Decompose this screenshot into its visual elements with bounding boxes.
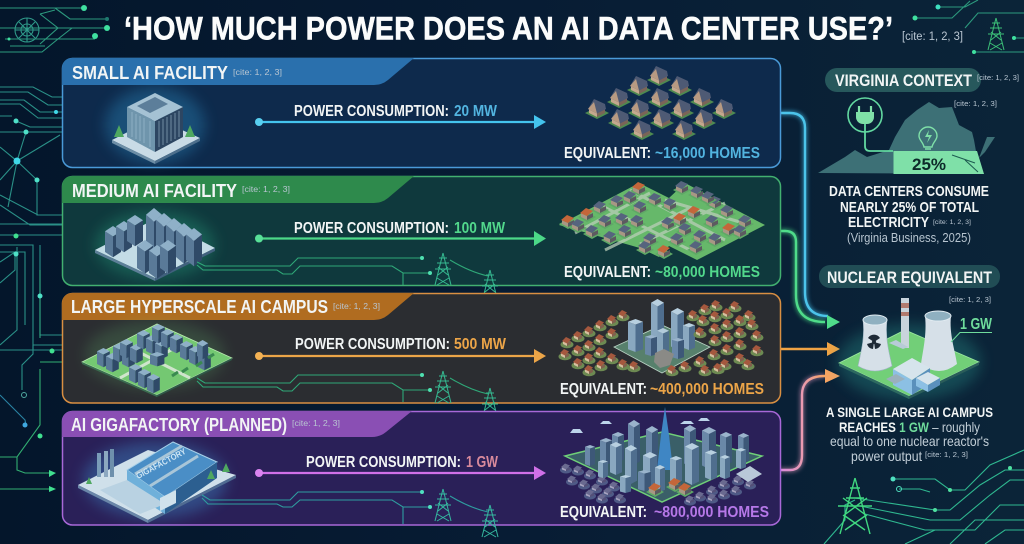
pill heading background	[825, 68, 981, 92]
circuit traces: top-right with pylon	[912, 0, 1024, 54]
citation: [cite: 1, 2, 3]	[977, 73, 1019, 82]
panel header: large	[62, 293, 414, 320]
icon: small data center building	[105, 87, 205, 164]
arrow	[255, 349, 546, 363]
panel header: small	[62, 58, 414, 85]
equivalent label: EQUIVALENT:	[560, 504, 647, 521]
panel: large hyperscale AI campus	[62, 293, 780, 420]
homes neighborhood	[559, 181, 765, 260]
source: (Virginia Business, 2025)	[847, 231, 971, 245]
panel header: gigafactory	[62, 411, 412, 437]
label: 1 GW	[951, 316, 993, 342]
map: Virginia with 25% share	[818, 102, 995, 174]
heading: medium AI facility: MEDIUM AI FACILITY	[72, 180, 238, 201]
description text: equal to one nuclear reactor's	[830, 433, 989, 449]
section: Virginia context	[818, 68, 1019, 245]
power value: 1 GW	[466, 454, 499, 471]
icon: hyperscale campus	[82, 321, 232, 397]
power value: 20 MW	[454, 103, 498, 120]
equivalent label: EQUIVALENT:	[564, 264, 651, 281]
circuit traces: left side	[0, 87, 62, 489]
panel: AI gigafactory	[62, 407, 780, 537]
heading: small AI facility: SMALL AI FACILITY	[72, 62, 229, 83]
equivalent value: ~80,000 HOMES	[655, 264, 760, 281]
icon: neural network hexagon	[15, 18, 39, 42]
homes cluster	[585, 66, 736, 140]
top-left nodes	[8, 5, 110, 40]
equivalent label: EQUIVALENT:	[564, 145, 651, 162]
heading: nuclear equivalent: NUCLEAR EQUIVALENT	[827, 268, 993, 287]
citation: [cite: 1, 2, 3]	[925, 450, 968, 459]
equivalent value: ~400,000 HOMES	[650, 381, 764, 398]
circuit traces and pylons	[197, 253, 498, 302]
heading: AI gigafactory: AI GIGAFACTORY (PLANNED)	[71, 414, 287, 435]
citation: [cite: 1, 2, 3]	[233, 67, 282, 77]
connector arrows to nuclear	[780, 113, 840, 470]
arrow	[255, 231, 546, 246]
equivalent label: EQUIVALENT:	[560, 381, 647, 398]
description text	[826, 404, 993, 464]
description text	[829, 183, 989, 231]
campus city with homes	[558, 299, 764, 376]
title: ‘HOW MUCH POWER DOES AN AI DATA CENTER USE?’	[124, 10, 893, 46]
power label: POWER CONSUMPTION:	[294, 220, 449, 237]
panel: small AI facility	[62, 58, 780, 168]
arrow	[255, 115, 546, 129]
pill heading background	[819, 265, 1000, 288]
description text: DATA CENTERS CONSUME	[829, 183, 989, 200]
section: nuclear equivalent	[819, 265, 1000, 464]
icon: gigafactory building	[78, 442, 236, 523]
equivalent value: ~800,000 HOMES	[654, 504, 769, 521]
description text: ELECTRICITY	[848, 214, 929, 231]
description text: NEARLY 25% OF TOTAL	[840, 199, 979, 216]
power label: POWER CONSUMPTION:	[306, 454, 461, 471]
citation: [cite: 1, 2, 3]	[954, 99, 997, 108]
citation: [cite: 1, 2, 3]	[242, 184, 290, 194]
description text: power output	[851, 448, 922, 464]
panel: medium AI facility	[62, 176, 780, 302]
label: 1 GW: 1 GW	[960, 316, 993, 333]
arrow	[255, 466, 546, 480]
citation: [cite: 1, 2, 3]	[333, 301, 380, 311]
power value: 100 MW	[454, 220, 506, 237]
description text: A SINGLE LARGE AI CAMPUS	[826, 404, 993, 420]
title citation: [cite: 1, 2, 3]	[902, 31, 963, 43]
power label: POWER CONSUMPTION:	[295, 336, 450, 353]
power value: 500 MW	[454, 336, 507, 353]
map: Virginia with 25% share: 25%	[912, 155, 946, 174]
citation: [cite: 1, 2, 3]	[292, 418, 340, 428]
heading: large hyperscale AI campus: LARGE HYPERSCALE AI CAMPUS	[71, 296, 328, 317]
icon: medium server cluster	[95, 208, 215, 281]
power label: POWER CONSUMPTION:	[294, 103, 449, 120]
panel header: medium	[62, 176, 414, 203]
circuit traces and pylons	[202, 489, 498, 537]
circuit traces and pylons	[197, 371, 498, 420]
citation: [cite: 1, 2, 3]	[933, 219, 971, 226]
icon: gigafactory building: GIGAFACTORY	[134, 446, 188, 481]
icon: nuclear plant	[837, 298, 981, 400]
description text: REACHES 1 GW – roughly	[839, 419, 980, 435]
circuit traces: top-left	[0, 8, 107, 52]
heading: Virginia context: VIRGINIA CONTEXT	[835, 71, 973, 90]
equivalent value: ~16,000 HOMES	[655, 145, 760, 162]
circuit nodes: left side	[14, 110, 58, 492]
dense city with homes	[560, 407, 762, 506]
circuit traces and pylon: bottom right	[824, 450, 1024, 544]
icon: power plug	[848, 98, 893, 151]
citation: [cite: 1, 2, 3]	[949, 295, 991, 304]
